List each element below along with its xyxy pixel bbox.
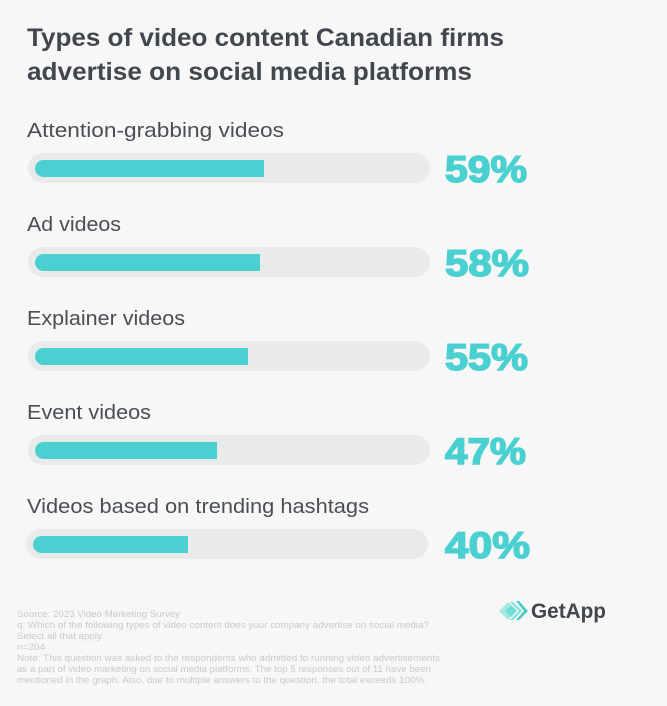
wordmark: GetApp <box>531 600 606 623</box>
source and methodology notes <box>17 609 441 685</box>
source and methodology notes: mentioned in the graph. Also, due to multiple answers to the question, the total exceeds 100%. <box>17 675 427 685</box>
row: attention-grabbing videos <box>27 120 527 190</box>
source and methodology notes: Source: 2023 Video Marketing Survey <box>17 609 181 619</box>
source and methodology notes: Note: This question was asked to the respondents who admitted to running video advertisements <box>17 653 441 663</box>
title: Types of video content Canadian firms <box>27 24 504 52</box>
row: attention-grabbing videos: 59% <box>445 149 527 190</box>
row: videos based on trending hashtags: Videos based on trending hashtags <box>27 496 369 518</box>
row: ad videos: Ad videos <box>27 214 121 236</box>
GetApp logo <box>499 600 606 623</box>
row: explainer videos: Explainer videos <box>27 308 185 330</box>
row: event videos <box>27 402 526 472</box>
row: explainer videos <box>27 308 528 378</box>
source and methodology notes: n=204 <box>17 642 45 652</box>
row: videos based on trending hashtags <box>26 496 530 566</box>
row: ad videos: 58% <box>445 243 529 284</box>
row: ad videos <box>27 214 529 284</box>
row: event videos: Event videos <box>27 402 151 424</box>
source and methodology notes: Select all that apply. <box>17 631 104 641</box>
title: advertise on social media platforms <box>27 58 472 86</box>
icon: GetApp chevrons <box>499 601 528 620</box>
row: videos based on trending hashtags: 40% <box>445 525 530 566</box>
source and methodology notes: q: Which of the following types of video content does your company advertise on social media? <box>17 620 429 630</box>
row: attention-grabbing videos: Attention-grabbing videos <box>27 120 284 142</box>
source and methodology notes: as a part of video marketing on social media platforms. The top 5 responses out of 11 have been <box>17 664 431 674</box>
title <box>27 24 504 86</box>
row: explainer videos: 55% <box>445 337 528 378</box>
row: event videos: 47% <box>445 431 526 472</box>
